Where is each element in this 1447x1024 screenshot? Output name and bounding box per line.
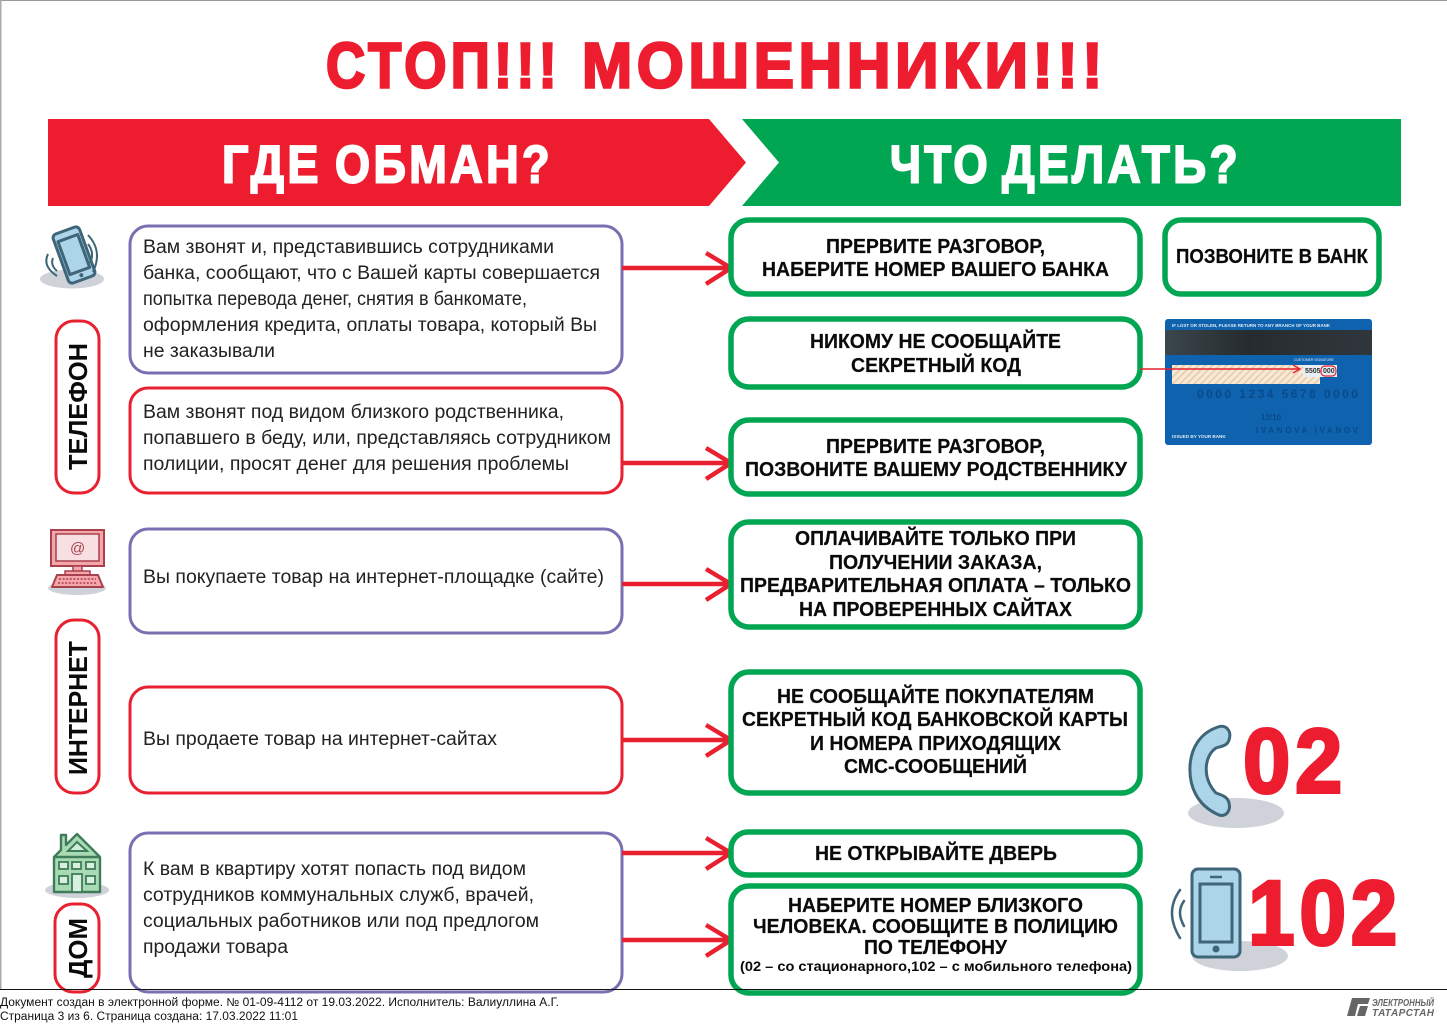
icon: mobile phone [1172,869,1288,971]
action: call close person and police: ПО ТЕЛЕФОНУ [864,936,1007,959]
action: do not open door [731,832,1140,875]
title [326,30,1107,102]
action: pay on receipt: НА ПРОВЕРЕННЫХ САЙТАХ [799,597,1072,621]
icon: ringing phone [40,226,104,288]
action: call close person and police: НАБЕРИТЕ НОМЕР БЛИЗКОГО [788,894,1083,917]
category label: internet: ИНТЕРНЕТ [63,641,93,775]
banner heading: what to do: ДЕЛАТЬ? [1002,136,1241,194]
arrow: selling online [622,725,731,756]
category label: phone [56,321,99,493]
banner heading: where is the fraud [222,136,553,194]
emergency number 02: 02 [1243,710,1347,812]
banner: where is the fraud [48,119,746,206]
action: call close person and police [731,886,1140,993]
illustration: bank card back: 5505 [1305,368,1321,375]
illustration: bank card back: 000 [1323,368,1335,375]
illustration: bank card back: 0000 1234 5678 0000 [1197,387,1358,401]
category label: internet [56,620,99,793]
arrow: relative call [622,448,731,479]
action: interrupt and call bank [731,220,1140,294]
arrow: bank call [622,253,731,284]
action: interrupt and call relative: ПОЗВОНИТЕ ВАШЕМУ РОДСТВЕННИКУ [745,458,1127,481]
panel: buying online scenario: Вы покупаете товар на интернет-площадке (сайте) [143,567,604,588]
panel: bank call scenario: оформления кредита, оплаты товара, который Вы [143,315,597,336]
banner heading: what to do [890,136,1241,194]
panel: home visit scenario: социальных работников или под предлогом [143,911,539,932]
arrow: buying online [622,569,731,600]
category label: home [55,904,99,992]
action: keep code secret: НИКОМУ НЕ СООБЩАЙТЕ [810,329,1061,353]
panel: relative call scenario: попавшего в беду, или, представляясь сотрудником [143,428,611,449]
panel: selling online scenario: Вы продаете товар на интернет-сайтах [143,729,498,750]
arrow: call close person [622,925,731,956]
title: СТОП!!! [326,30,561,102]
icon: computer [48,530,106,595]
illustration: bank card back: CUSTOMER SIGNATURE [1294,358,1335,362]
action: call close person and police: (02 – со стационарного,102 – с мобильного телефона) [740,958,1132,974]
action: interrupt and call bank: НАБЕРИТЕ НОМЕР ВАШЕГО БАНКА [762,258,1109,281]
action: do not share with buyers [731,672,1140,793]
action: do not open door: НЕ ОТКРЫВАЙТЕ ДВЕРЬ [815,841,1057,865]
action: interrupt and call bank: ПРЕРВИТЕ РАЗГОВОР, [826,235,1045,258]
action: interrupt and call relative: ПРЕРВИТЕ РАЗГОВОР, [826,435,1045,458]
arrow: do not open door [622,838,731,869]
panel: bank call scenario: не заказывали [143,341,275,362]
action: call close person and police: ЧЕЛОВЕКА. СООБЩИТЕ В ПОЛИЦИЮ [753,915,1118,938]
panel: home visit scenario: сотрудников коммунальных служб, врачей, [143,885,534,906]
action: keep code secret: СЕКРЕТНЫЙ КОД [851,353,1021,377]
panel: home visit scenario: продажи товара [143,937,288,958]
action: pay on receipt: ПРЕДВАРИТЕЛЬНАЯ ОПЛАТА – ТОЛЬКО [740,574,1131,597]
footer text: Страница 3 из 6. Страница создана: 17.03.2022 11:01 [0,1011,298,1023]
banner heading: what to do: ЧТО [890,136,991,194]
footer text [0,997,559,1023]
panel: relative call scenario [130,388,622,493]
panel: bank call scenario: попытка перевода денег, снятия в банкомате, [143,289,527,310]
icon: handset [1188,726,1284,828]
action: pay on receipt [731,522,1140,627]
category label: home: ДОМ [63,918,93,978]
action: call the bank: ПОЗВОНИТЕ В БАНК [1176,245,1368,268]
icon: computer: @ [70,540,85,557]
footer text: Документ создан в электронной форме. № 01-09-4112 от 19.03.2022. Исполнитель: Валиуллина А.Г. [0,997,559,1009]
action: do not share with buyers: НЕ СООБЩАЙТЕ ПОКУПАТЕЛЯМ [777,684,1094,708]
action: keep code secret [731,319,1140,387]
illustration: bank card back: IVANOVA IVANOV [1256,426,1359,435]
panel: relative call scenario: Вам звонят под видом близкого родственника, [143,402,564,423]
illustration: bank card back: 12/10 [1261,413,1282,422]
banner heading: where is the fraud: ГДЕ [222,136,322,194]
action: pay on receipt: ПОЛУЧЕНИИ ЗАКАЗА, [829,551,1042,574]
arrow: secret code pointer [1140,365,1300,373]
illustration: bank card back: ISSUED BY YOUR BANK [1172,434,1226,439]
title: МОШЕННИКИ!!! [582,30,1107,102]
action: call the bank [1165,220,1379,294]
panel: selling online scenario [130,687,622,793]
panel: home visit scenario: К вам в квартиру хотят попасть под видом [143,859,526,880]
logo: Electronic Tatarstan [1347,996,1435,1019]
illustration: bank card back: IF LOST OR STOLEN, PLEASE RETURN TO ANY BRANCH OF YOUR BANK [1172,323,1331,328]
emergency number 102: 102 [1248,862,1402,964]
logo: Electronic Tatarstan: ТАТАРСТАН [1372,1008,1435,1019]
icon: house [45,834,109,898]
action: interrupt and call relative [731,420,1140,494]
panel: relative call scenario: полиции, просят денег для решения проблемы [143,454,569,475]
panel: bank call scenario: банка, сообщают, что с Вашей карты совершается [143,263,600,284]
panel: bank call scenario [130,226,622,373]
illustration: bank card back [1165,319,1372,445]
action: do not share with buyers: И НОМЕРА ПРИХОДЯЩИХ [810,732,1061,755]
banner heading: where is the fraud: ОБМАН? [335,136,553,194]
category label: phone: ТЕЛЕФОН [63,343,93,470]
panel: buying online scenario [130,529,622,633]
banner: what to do [742,119,1401,206]
panel: home visit scenario [130,833,622,992]
action: pay on receipt: ОПЛАЧИВАЙТЕ ТОЛЬКО ПРИ [795,526,1076,550]
action: do not share with buyers: СМС-СООБЩЕНИЙ [844,754,1027,778]
action: do not share with buyers: СЕКРЕТНЫЙ КОД БАНКОВСКОЙ КАРТЫ [742,707,1128,731]
panel: bank call scenario: Вам звонят и, представившись сотрудниками [143,237,554,258]
